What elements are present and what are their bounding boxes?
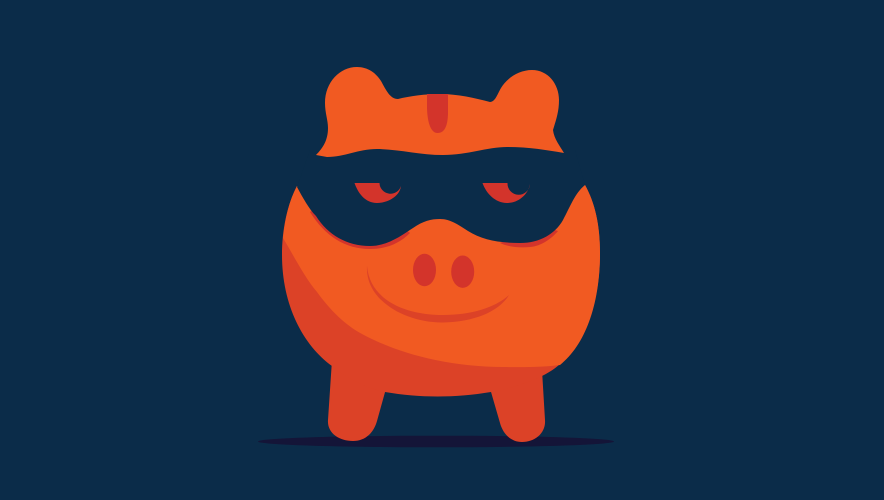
left leg bbox=[328, 360, 387, 441]
right eye bbox=[482, 183, 530, 203]
ground shadow bbox=[258, 436, 614, 447]
body highlight bbox=[283, 185, 600, 367]
snout nostril left bbox=[413, 254, 436, 286]
head top bbox=[316, 67, 564, 157]
coin slot bbox=[427, 94, 448, 133]
bandit mask bbox=[297, 150, 585, 246]
icon: head and ears bbox=[316, 67, 564, 157]
right leg bbox=[489, 370, 545, 442]
body base shade bbox=[282, 185, 600, 396]
left eye bbox=[354, 183, 401, 203]
mask shadow right bbox=[500, 225, 558, 247]
mask shadow left bbox=[310, 205, 410, 249]
icon: piggy body bbox=[282, 185, 600, 442]
snout nostril right bbox=[451, 256, 474, 288]
smile bbox=[367, 266, 509, 323]
